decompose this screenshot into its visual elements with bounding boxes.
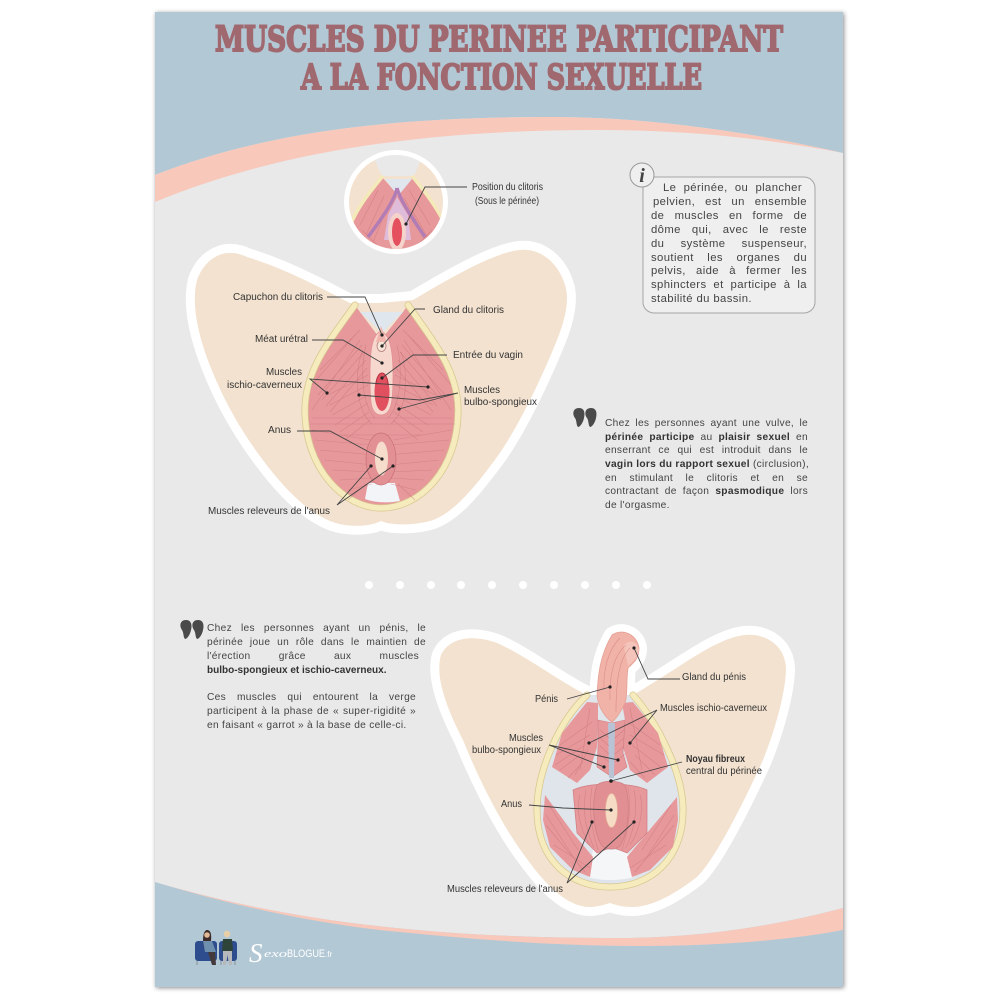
label: ischio-caverneux: Muscles bbox=[266, 367, 302, 378]
icon: two people in armchairs bbox=[195, 930, 237, 965]
label: capuchon: Capuchon du clitoris bbox=[233, 292, 323, 303]
text: penis: bulbo-spongieux et ischio-caverneux. bbox=[207, 665, 386, 676]
label: gland du penis bbox=[632, 646, 746, 683]
text: penis: l'érection grâce aux muscles bbox=[207, 651, 419, 662]
vaginal vestibule bbox=[370, 331, 393, 415]
text: vulve: périnée participe au plaisir sexuel en bbox=[605, 432, 808, 443]
text: info box: soutient les organes du bbox=[651, 252, 807, 264]
icon: info: i bbox=[639, 165, 645, 187]
text: info box bbox=[651, 182, 807, 305]
text: vulve: enserrant ce qui est introduit dans le bbox=[605, 445, 808, 456]
quote mark: vulve bbox=[573, 408, 596, 427]
title: MUSCLES DU PERINEE PARTICIPANT bbox=[215, 19, 783, 60]
sphincter and anus bbox=[366, 433, 396, 485]
text: vulve: de l'orgasme. bbox=[605, 500, 670, 511]
text: vulve bbox=[605, 418, 809, 511]
label: entree du vagin: Entrée du vagin bbox=[453, 350, 523, 361]
text: info box: de muscles en forme de bbox=[651, 210, 807, 222]
male labels bbox=[447, 646, 767, 895]
label: releveurs: Muscles releveurs de l'anus bbox=[208, 506, 330, 517]
label: noyau fibreux: central du périnée bbox=[686, 766, 762, 777]
label: clitoris position: Position du clitoris bbox=[472, 182, 543, 193]
central strip and bulbo-spongious muscle bbox=[597, 720, 627, 777]
poster panel bbox=[155, 12, 843, 987]
label: meat uretral: Méat urétral bbox=[255, 334, 308, 345]
label: ischio-caverneux: Muscles ischio-caverneux bbox=[660, 703, 767, 714]
text: penis: Chez les personnes ayant un pénis, le bbox=[207, 623, 426, 634]
dotted separator bbox=[365, 581, 651, 589]
central levator bbox=[573, 784, 647, 853]
text: info box: dôme qui, avec le reste bbox=[651, 224, 807, 236]
text: penis: en faisant « garrot » à la base de celle-ci. bbox=[207, 720, 407, 731]
text: penis: périnée joue un rôle dans le maintien de bbox=[207, 637, 426, 648]
text: vulve: Chez les personnes ayant une vulve, le bbox=[605, 418, 808, 429]
text: info box: pelvis, aide à fermer les bbox=[651, 265, 807, 277]
text: vulve: vagin lors du rapport sexuel (circlusion), bbox=[605, 459, 809, 470]
text: penis: participent à la phase de « super-rigidité » bbox=[207, 706, 416, 717]
label: bulbo-spongieux: bulbo-spongieux bbox=[464, 397, 537, 408]
label: penis: Pénis bbox=[535, 694, 558, 705]
muscle fibres bbox=[310, 330, 455, 500]
male anatomy diagram bbox=[439, 632, 786, 907]
logo bbox=[249, 938, 332, 968]
label: bulbo-spongieux: Muscles bbox=[464, 385, 500, 396]
text: info box: Le périnée, ou plancher bbox=[663, 182, 802, 194]
text: info box: stabilité du bassin. bbox=[651, 293, 752, 305]
text: vulve: en stimulant le clitoris et en se bbox=[605, 473, 808, 484]
header band bbox=[155, 12, 843, 987]
label: noyau fibreux: Noyau fibreux bbox=[686, 754, 745, 765]
label: anus bbox=[268, 425, 384, 461]
penis bbox=[597, 632, 639, 722]
ischio-cavernous muscles bbox=[552, 702, 668, 783]
label: clitoris position: (Sous le périnée) bbox=[475, 196, 539, 207]
label: releveurs bbox=[208, 464, 395, 517]
label: gland: Gland du clitoris bbox=[433, 305, 504, 316]
label: gland du penis: Gland du pénis bbox=[682, 672, 746, 683]
label: clitoris position bbox=[404, 182, 543, 226]
label: bulbo-spongieux: Muscles bbox=[509, 733, 543, 744]
label: ischio-caverneux bbox=[227, 367, 430, 395]
label: bulbo-spongieux bbox=[472, 733, 620, 769]
text: vulve: contractant de façon spasmodique lors bbox=[605, 486, 808, 497]
label: entree du vagin bbox=[380, 350, 523, 380]
label: bulbo-spongieux bbox=[357, 385, 537, 411]
text: penis: Ces muscles qui entourent la verge bbox=[207, 692, 416, 703]
white gap at bottom bbox=[588, 850, 634, 880]
label: capuchon bbox=[233, 292, 384, 337]
label: anus: Anus bbox=[501, 799, 522, 810]
text: penis bbox=[207, 623, 426, 731]
info box bbox=[630, 163, 815, 313]
text: info box: du système suspenseur, bbox=[651, 238, 807, 250]
label: releveurs: Muscles releveurs de l'anus bbox=[447, 884, 563, 895]
text: info box: pelvien, est un ensemble bbox=[653, 196, 807, 208]
icon: info bbox=[630, 163, 654, 187]
inset: clitoris position bbox=[344, 150, 452, 260]
label: penis bbox=[535, 685, 612, 705]
label: meat uretral bbox=[255, 334, 384, 365]
quote mark: penis bbox=[180, 620, 203, 639]
title bbox=[215, 19, 783, 98]
text: info box: sphincters et participe à la bbox=[651, 279, 807, 291]
label: bulbo-spongieux: bulbo-spongieux bbox=[472, 745, 541, 756]
label: noyau fibreux bbox=[609, 754, 762, 783]
female labels bbox=[208, 292, 537, 517]
logo: .fr bbox=[325, 950, 332, 959]
logo: BLOGUE bbox=[287, 948, 325, 960]
female anatomy diagram bbox=[195, 250, 567, 526]
label: releveurs bbox=[447, 820, 636, 895]
label: ischio-caverneux bbox=[587, 703, 767, 745]
logo: S bbox=[249, 938, 263, 968]
label: anus bbox=[501, 799, 613, 812]
label: anus: Anus bbox=[268, 425, 291, 436]
label: ischio-caverneux: ischio-caverneux bbox=[227, 380, 302, 391]
title: A LA FONCTION SEXUELLE bbox=[300, 57, 702, 98]
logo: exo bbox=[264, 948, 288, 960]
outer levator muscles bbox=[543, 795, 678, 877]
label: gland bbox=[380, 305, 504, 348]
